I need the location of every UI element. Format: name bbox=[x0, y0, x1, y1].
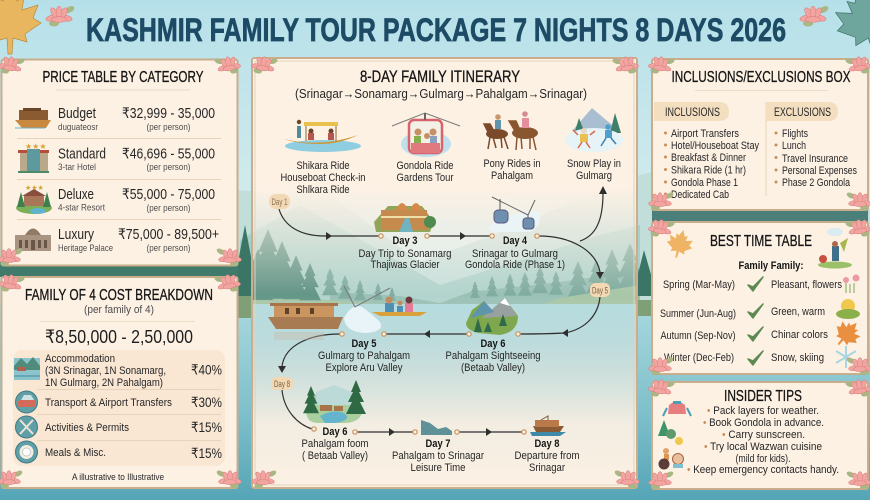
activity: snow play: Snow Play in bbox=[567, 158, 621, 170]
row: transport: Transport & Airport Transfers bbox=[45, 397, 172, 409]
maple leaf top right bbox=[828, 0, 870, 61]
icon: resort bbox=[16, 184, 52, 214]
badge: day 5: Day 5 bbox=[592, 286, 608, 296]
season row: spring bbox=[663, 274, 860, 293]
column: inclusions: Airport Transfers bbox=[671, 128, 739, 140]
stop: day 7: Leisure Time bbox=[410, 462, 466, 474]
column: exclusions: Flights bbox=[782, 128, 808, 140]
column: inclusions: Breakfast & Dinner bbox=[671, 152, 746, 164]
footnote: A illustrative to Illustrative bbox=[72, 472, 164, 483]
stop: day 7: Day 7 bbox=[426, 438, 450, 450]
row: transport: ₹30% bbox=[191, 394, 222, 410]
heading: best time: BEST TIME TABLE bbox=[710, 233, 812, 250]
activity: shikara ride: Shikara Ride bbox=[296, 160, 350, 172]
panel: best time table bbox=[647, 216, 870, 375]
price row: standard bbox=[18, 142, 215, 173]
cost table bbox=[13, 350, 225, 466]
season row: winter bbox=[664, 346, 856, 368]
activity: pony rides bbox=[484, 111, 540, 182]
activity: snow play: Gulmarg bbox=[576, 170, 612, 182]
column: inclusions: Hotel/Houseboat Stay bbox=[671, 140, 759, 152]
icon: sun over hills bbox=[836, 299, 860, 319]
row: accommodation: (3N Srinagar, 1N Sonamarg, bbox=[45, 365, 166, 377]
route waypoints bbox=[312, 234, 539, 434]
price row: luxury: ₹75,000 - 89,500+ bbox=[118, 227, 219, 243]
season row: autumn: Autumn (Sep-Nov) bbox=[660, 330, 736, 342]
activity: shikara ride: Houseboat Check-in bbox=[280, 172, 366, 184]
season row: spring: Spring (Mar-May) bbox=[663, 279, 735, 291]
tips list: • Keep emergency contacts handy. bbox=[687, 464, 839, 476]
illustration: houseboat on lake bbox=[268, 303, 343, 340]
route arrows bbox=[278, 186, 607, 436]
stop: day 6 pahalgam room bbox=[302, 380, 368, 462]
activity: shikara ride: Shlkara Ride bbox=[296, 184, 350, 196]
heading: price table: PRICE TABLE BY CATEGORY bbox=[42, 69, 204, 86]
panel: 8-day family itinerary bbox=[250, 53, 640, 488]
stop: day 3 sonamarg: Thajiwas Glacier bbox=[370, 259, 440, 271]
column: exclusions: EXCLUSIONS bbox=[774, 107, 831, 119]
icon: trees and sun bbox=[658, 420, 683, 445]
illustration: family with tree bbox=[818, 228, 852, 268]
stop: day 3 sonamarg: Day 3 bbox=[392, 235, 418, 247]
icon: houseboat bbox=[15, 108, 51, 128]
price row: budget: Budget bbox=[58, 105, 97, 122]
price row: deluxe bbox=[16, 184, 215, 214]
price row: standard: 3-tar Hotel bbox=[58, 162, 96, 173]
badge: day 1 bbox=[269, 194, 290, 209]
icon: plate bbox=[16, 441, 38, 463]
icon: crossed tools bbox=[16, 416, 38, 438]
illustration: snowy slope and cables bbox=[344, 286, 390, 333]
row: accommodation: Accommodation bbox=[45, 353, 115, 365]
price row: luxury: Heritage Palace bbox=[58, 243, 113, 254]
activity: pony rides: Pahalgam bbox=[491, 170, 533, 182]
column: inclusions: Gondola Phase 1 bbox=[671, 177, 738, 189]
badge: day 6: Day 8 bbox=[274, 379, 290, 389]
tips list: • Try local Wazwan cuisine bbox=[704, 441, 822, 453]
column: inclusions: INCLUSIONS bbox=[665, 107, 720, 119]
activity: shikara ride bbox=[280, 120, 366, 196]
illustration: pahalgam mountains bbox=[466, 298, 518, 335]
row: meals bbox=[16, 441, 222, 463]
total cost: ₹8,50,000 - 2,50,000 bbox=[45, 326, 193, 347]
stop: day 6 sightseeing bbox=[446, 338, 540, 374]
season row: summer: Summer (Jun-Aug) bbox=[660, 308, 736, 320]
season row: summer: Green, warm bbox=[771, 306, 825, 318]
price row: budget: ₹32,999 - 35,000 bbox=[122, 106, 215, 122]
icon: snowflake bbox=[836, 346, 856, 368]
panel: inclusions and exclusions bbox=[647, 53, 870, 210]
maple leaf top left bbox=[0, 0, 41, 54]
price row: standard: Standard bbox=[58, 146, 106, 163]
icon: resort: ★★★ bbox=[25, 184, 44, 192]
season row: winter: Winter (Dec-Feb) bbox=[664, 352, 734, 364]
price row: deluxe: (per person) bbox=[146, 203, 190, 214]
tips list: (mild for kids). bbox=[736, 453, 790, 465]
badge: day 5 bbox=[590, 283, 610, 297]
stop: day 8: Srinagar bbox=[529, 462, 565, 474]
row: meals: ₹15% bbox=[191, 445, 222, 461]
stop: day 5: Gulmarg to Pahalgam bbox=[318, 350, 410, 362]
price row: standard: ₹46,696 - 55,000 bbox=[122, 147, 215, 163]
price row: luxury: Luxury bbox=[58, 226, 94, 243]
row: accommodation: 1N Gulmarg, 2N Pahalgam) bbox=[45, 377, 163, 389]
price row: deluxe: Deluxe bbox=[58, 186, 94, 203]
stop: day 5 bbox=[318, 338, 410, 374]
price row: budget: duguateosr bbox=[58, 122, 98, 133]
season row: spring: Pleasant, flowers bbox=[771, 279, 842, 291]
tips list: • Book Gondola in advance. bbox=[703, 417, 824, 429]
price row: luxury: (per person) bbox=[146, 243, 190, 254]
column: inclusions: Dedicated Cab bbox=[671, 189, 729, 201]
icon: children bbox=[658, 448, 684, 470]
icon: flowers bbox=[843, 274, 860, 293]
column: inclusions bbox=[654, 102, 759, 201]
price row: deluxe: 4-star Resort bbox=[58, 202, 105, 214]
icon: chinar leaf bbox=[828, 314, 867, 353]
lotus top left bbox=[45, 5, 76, 27]
column: exclusions: Phase 2 Gondola bbox=[782, 177, 851, 189]
stop: day 8: Departure from bbox=[514, 450, 580, 462]
price row: standard: (per person) bbox=[146, 162, 190, 173]
tips list: • Pack layers for weather. bbox=[707, 405, 819, 417]
column: exclusions: Travel Insurance bbox=[782, 153, 848, 165]
row: accommodation: ₹40% bbox=[191, 362, 222, 378]
stop: day 6 sightseeing: Pahalgam Sightseeing bbox=[446, 350, 540, 362]
route subtitle: (Srinagar→Sonamarg→Gulmarg→Pahalgam→Srinagar) bbox=[295, 86, 587, 101]
tips list: • Carry sunscreen. bbox=[722, 429, 805, 441]
stop: day 6 sightseeing: Day 6 bbox=[480, 338, 506, 350]
activity: gondola ride: Gondola Ride bbox=[396, 160, 454, 172]
icon: jacket bbox=[663, 401, 691, 416]
badge: day 1: Day 1 bbox=[272, 197, 288, 207]
icon: heritage palace bbox=[15, 228, 51, 251]
stop: day 4 gulmarg: Day 4 bbox=[503, 235, 528, 247]
icon: car bbox=[16, 391, 38, 413]
icon: mountain lake bbox=[14, 357, 40, 380]
stop: day 6 pahalgam room: ( Betaab Valley) bbox=[302, 450, 368, 462]
heading: cost breakdown: FAMILY OF 4 COST BREAKDOWN bbox=[25, 287, 213, 304]
stop: day 5: Day 5 bbox=[352, 338, 376, 350]
activity: gondola ride: Gardens Tour bbox=[396, 172, 454, 184]
price row: budget bbox=[15, 105, 215, 133]
stop: day 8 bbox=[514, 416, 580, 474]
icon: autumn leaf bbox=[664, 227, 696, 261]
lotus top right bbox=[799, 5, 830, 27]
stop: day 3 sonamarg: Day Trip to Sonamarg bbox=[358, 248, 452, 260]
column: exclusions: Lunch bbox=[782, 140, 806, 152]
stop: day 6 pahalgam room: Day 6 bbox=[322, 426, 348, 438]
stop: day 6 sightseeing: (Betaab Valley) bbox=[461, 362, 525, 374]
badge: day 6 bbox=[271, 377, 293, 390]
season row: autumn bbox=[660, 314, 867, 353]
stop: day 3 sonamarg bbox=[358, 203, 452, 271]
stop: day 7: Pahalgam to Srinagar bbox=[392, 450, 484, 462]
panel: family of 4 cost breakdown bbox=[0, 271, 242, 488]
tips list bbox=[687, 405, 839, 476]
row: activities: Activities & Permits bbox=[45, 422, 129, 434]
illustration: family in boat bbox=[372, 296, 427, 316]
subheading: family family: Family Family: bbox=[738, 260, 804, 272]
season row: autumn: Chinar colors bbox=[771, 329, 828, 341]
icon: hotel: ★★★ bbox=[25, 142, 47, 151]
stop: day 7 bbox=[392, 420, 484, 474]
panel: price table by category bbox=[0, 53, 242, 266]
column: exclusions bbox=[766, 102, 857, 189]
activity: snow play bbox=[565, 108, 623, 182]
row: meals: Meals & Misc. bbox=[45, 447, 106, 459]
stop: day 4 gulmarg bbox=[465, 197, 565, 271]
row: activities bbox=[16, 416, 222, 438]
column: inclusions: Shikara Ride (1 hr) bbox=[671, 164, 746, 176]
activity: pony rides: Pony Rides in bbox=[484, 158, 540, 170]
icon: hotel bbox=[18, 142, 49, 173]
row: activities: ₹15% bbox=[191, 419, 222, 435]
row: transport bbox=[16, 391, 222, 413]
row: accommodation bbox=[14, 353, 222, 389]
heading: insider tips: INSIDER TIPS bbox=[724, 388, 802, 405]
price row: luxury bbox=[15, 226, 219, 254]
stop: day 4 gulmarg: Gondola Ride (Phase 1) bbox=[465, 259, 565, 271]
stop: day 8: Day 8 bbox=[534, 438, 560, 450]
activity: gondola ride bbox=[392, 113, 460, 184]
panel: insider tips bbox=[647, 376, 870, 489]
price row: deluxe: ₹55,000 - 75,000 bbox=[122, 187, 215, 203]
subheading: per family: (per family of 4) bbox=[84, 304, 154, 316]
season row: winter: Snow, skiing bbox=[771, 352, 824, 364]
heading: itinerary: 8-DAY FAMILY ITINERARY bbox=[360, 68, 520, 86]
stop: day 6 pahalgam room: Pahalgam foom bbox=[302, 438, 368, 450]
stop: day 4 gulmarg: Srinagar to Gulmarg bbox=[472, 248, 558, 260]
season row: summer bbox=[660, 299, 860, 320]
price row: budget: (per person) bbox=[146, 122, 190, 133]
stop: day 5: Explore Aru Valley bbox=[326, 362, 403, 374]
